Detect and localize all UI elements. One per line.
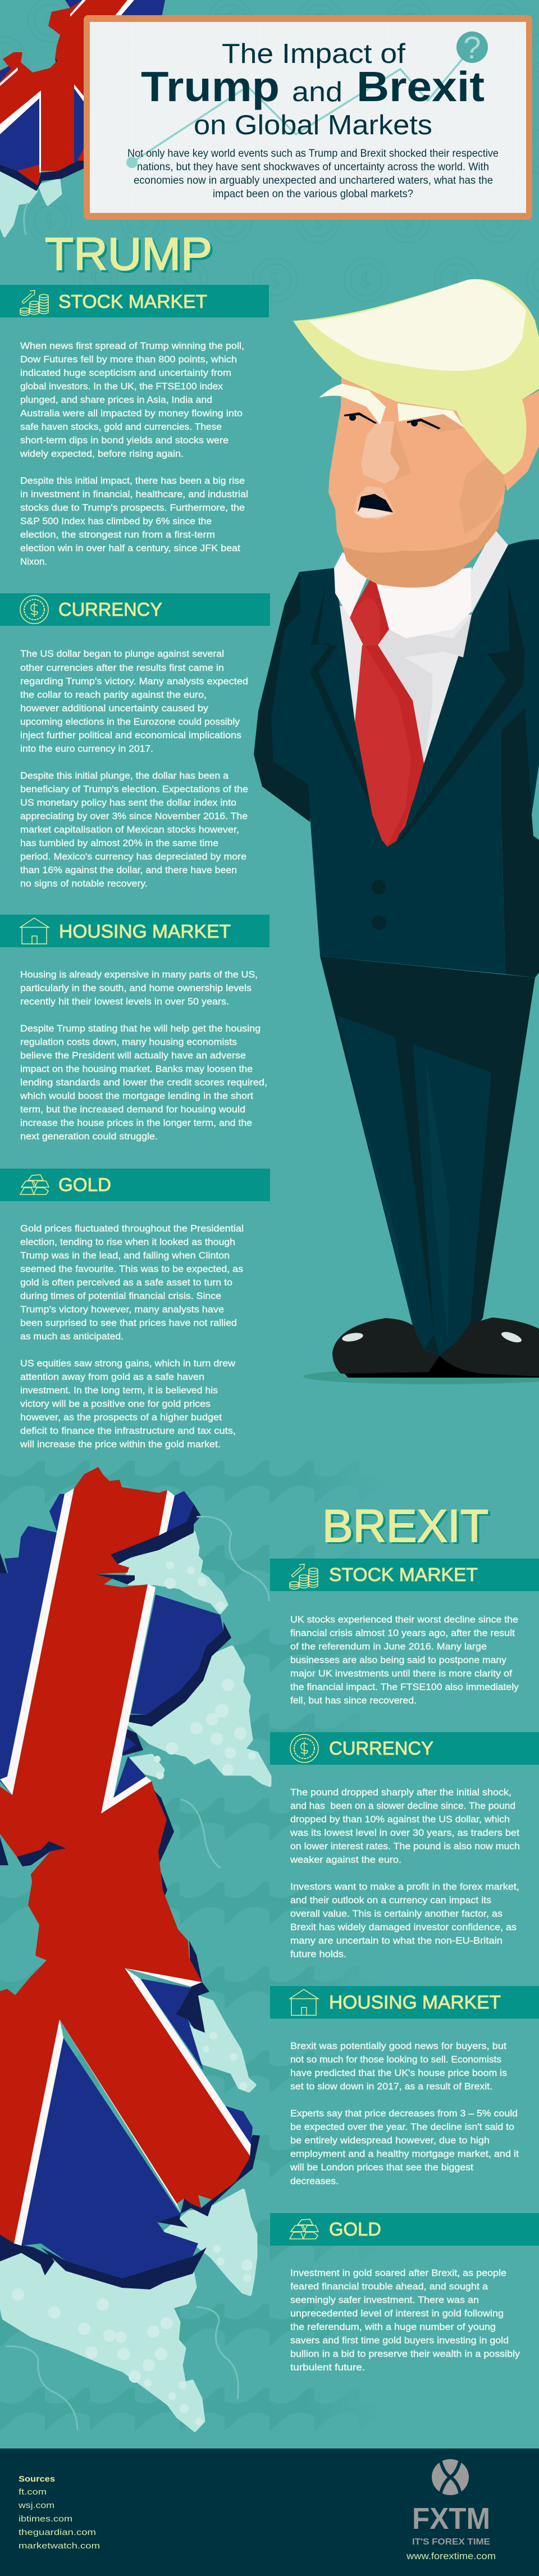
mouth [354,486,395,520]
text [290,2268,520,2373]
text: unprecedented level of interest in gold following [290,2308,504,2319]
heading: STOCK MARKET [58,291,207,312]
text: US monetary policy has sent the dollar index into [20,797,236,808]
text: beneficiary of Trump's election. Expectations of the [20,784,248,794]
text: Investors want to make a profit in the forex market, [290,1881,519,1892]
wave pattern background [0,1461,314,2430]
right sleeve dark [501,815,539,978]
band [0,285,269,317]
red cross [0,1467,250,2243]
text: short-term dips in bond yields and stocks were [20,435,229,446]
text: no signs of notable recovery. [20,878,148,889]
text: the referendum, with a huge number of young [290,2321,496,2332]
coin pattern background [0,0,539,302]
intro text [127,147,499,200]
sources: ft.com [19,2487,47,2497]
text: impact on the housing market. Banks may loosen the [20,1064,253,1074]
heading: GOLD [58,1174,111,1195]
sources: marketwatch.com [19,2541,100,2551]
text: the financial impact. The FTSE100 also immediately [290,1682,519,1692]
title text: Brexit [357,63,485,110]
band [0,593,270,626]
text: was its lowest level in over 30 years, as traders bet [290,1827,519,1838]
text: market capitalisation of Mexican stocks however, [20,824,239,835]
text: upcoming elections in the Eurozone could possibly [20,716,240,727]
text: employment and a healthy mortgage market, and it [290,2148,519,2159]
heading: GOLD [329,2219,381,2239]
text: Despite this initial impact, there has been a big rise [20,475,245,486]
text: be entirely widespread however, due to high [290,2135,490,2146]
text: of the referendum in June 2016. Many large [290,1641,487,1652]
floor shadow [303,1369,539,1384]
section: trump currency [0,593,270,889]
text: not so much for those looking to sell. Economists [290,2054,501,2065]
foam bubbles [12,1561,256,2425]
title text: Trump [141,63,280,110]
ear [504,390,539,491]
section: brexit currency [270,1732,539,1960]
text: indicated huge scepticism and uncertainty from [20,367,231,378]
text: during times of potential financial crisis. Since [20,1291,221,1301]
text [290,1614,519,1706]
hair [293,279,539,475]
text: gold is often perceived as a safe asset to turn to [20,1277,232,1288]
text: believe the President will actually have an adverse [20,1050,246,1061]
band [270,1559,539,1591]
text: other currencies after the results first came in [20,662,224,673]
icon: house [20,918,49,944]
section: brexit housing market [270,1986,539,2187]
brand name: FXTM [412,2502,490,2536]
text: UK stocks experienced their worst decline since the [290,1614,518,1625]
band [270,2213,539,2246]
eyes [344,412,441,429]
text [20,1223,244,1450]
white stripes [0,1488,251,2246]
chart line decoration [126,30,488,168]
text: Gold prices fluctuated throughout the Presidential [20,1223,244,1234]
website: www.forextime.com [406,2551,496,2561]
text: will increase the price within the gold market. [20,1439,221,1450]
text: US equities saw strong gains, which in turn drew [20,1358,236,1369]
text: as much as anticipated. [20,1331,124,1342]
section: trump gold [0,1169,270,1450]
section: trump housing market [0,915,270,1142]
heading: HOUSING MARKET [329,1992,501,2012]
text: and has been on a slower decline since. The pound [290,1800,515,1811]
cheek shade [459,457,505,534]
blue fields [0,1491,253,2278]
section: trump stock market [0,285,269,567]
icon: gold bars [290,2219,318,2239]
text: period. Mexico's currency has depreciated by more [20,851,246,862]
text [20,648,248,889]
left sleeve [254,572,326,822]
text: fell, but has since recovered. [290,1695,417,1706]
intro text: impact been on the various global markets? [213,188,413,200]
eyebrows [319,384,488,441]
face [328,378,505,553]
intro text: economies now in arguably unexpected and unchartered waters, what has the [134,174,493,187]
text: savers and first time gold buyers investing in gold [290,2335,509,2346]
text: turbulent future. [290,2362,365,2373]
text: recently hit their lowest levels in over 50 years. [20,996,229,1007]
text: weaker against the euro. [290,1854,401,1865]
text: next generation could struggle. [20,1131,158,1142]
text: however additional uncertainty caused by [20,703,209,714]
text: term, but the increased demand for housing would [20,1104,245,1115]
sea streaks [6,1516,269,2430]
section: brexit stock market [270,1559,539,1706]
text: Brexit has widely damaged investor confidence, as [290,1921,517,1933]
text: which would boost the mortgage lending in the short [20,1091,253,1101]
text: appreciating by over 3% since November 2016. The [20,811,248,821]
text: increase the house prices in the longer term, and the [20,1117,252,1128]
text: seemingly safer investment. There was an [290,2295,479,2305]
sources [18,2474,100,2551]
text: Despite Trump stating that he will help get the housing [20,1023,261,1034]
heading: BREXIT: BREXIT [322,1501,488,1552]
shoes [332,1317,539,1378]
title text: and [292,77,342,107]
text: Investment in gold soared after Brexit, as people [290,2268,506,2278]
text: inject further political and economical implications [20,730,241,740]
text: The pound dropped sharply after the initial shock, [290,1787,511,1798]
band [270,1986,539,2019]
footer [0,2448,539,2576]
text: Dow Futures fell by more than 800 points, which [20,354,237,365]
nose [361,421,412,484]
shirt [340,606,472,764]
heading: CURRENCY [329,1738,433,1759]
text [290,1787,520,1960]
icon: stock coins [20,290,48,316]
icon: FXTM logo [432,2459,469,2495]
jacket shading [310,583,532,930]
text [290,2041,519,2187]
text: election, tending to rise when it looked as though [20,1237,235,1247]
text: S&P 500 Index has climbed by 6% since the [20,516,212,526]
text: plunged, and share prices in Asia, India and [20,394,212,405]
text: election, the strongest run from a first-term [20,529,215,540]
text: future holds. [290,1948,346,1960]
text: decreases. [290,2175,339,2187]
tie [349,579,424,847]
heading: TRUMP: TRUMP [47,231,214,282]
top flag map of UK [0,0,165,236]
heading: BREXIT: BREXIT [325,1502,491,1553]
title text: on Global Markets [194,110,432,140]
text: into the euro currency in 2017. [20,743,153,754]
heading: STOCK MARKET [329,1564,478,1585]
text: will be London prices that see the biggest [290,2162,473,2173]
text: Brexit was potentially good news for buyers, but [290,2041,506,2051]
icon: gold bars [20,1175,49,1194]
text: The US dollar began to plunge against several [20,648,224,659]
text: seemed the favourite. This was to be expected, as [20,1264,243,1274]
icon: dollar coin [20,596,48,624]
text: have predicted that the UK's house price boom is [290,2068,507,2078]
text: financial crisis almost 10 years ago, after the result [290,1628,515,1638]
text: Trump was in the lead, and falling when Clinton [20,1250,230,1261]
heading: HOUSING MARKET [59,921,231,942]
text: attention away from gold as a safe haven [20,1371,204,1382]
text: regulation costs down, many housing economists [20,1037,237,1047]
text: election win in over half a century, since JFK beat [20,543,240,553]
chart line decoration: ? [463,30,481,65]
text: businesses are also being said to postpone many [290,1655,507,1665]
text: When news first spread of Trump winning the poll, [20,340,244,351]
icon: dollar coin [290,1734,318,1762]
text [20,340,248,567]
navy shadow [0,1504,260,2289]
trousers [320,956,535,1356]
sources: ibtimes.com [19,2514,72,2524]
text: the collar to reach parity against the euro, [20,689,207,700]
text: than 16% against the dollar, and there have been [20,865,237,875]
sources: Sources [19,2474,55,2484]
neck [342,489,505,588]
intro text: nations, but they have sent shockwaves of uncertainty across the world. With [137,161,489,173]
trump illustration [254,279,539,1384]
text: safe haven stocks, gold and currencies. These [20,421,222,432]
text: victory will be a positive one for gold prices [20,1398,211,1409]
section: brexit gold [270,2213,539,2373]
text: Despite this initial plunge, the dollar has been a [20,770,229,781]
text: overall value. This is certainly another factor, as [290,1908,503,1919]
text: Housing is already expensive in many parts of the US, [20,969,258,980]
text [20,969,267,1142]
text: investment. In the long term, it is believed his [20,1385,218,1396]
heading: CURRENCY [58,599,162,620]
text: global investors. In the UK, the FTSE100 index [20,381,223,392]
icon: house [290,1989,318,2015]
text: set to slow down in 2017, as a result of Brexit. [290,2081,492,2092]
title card [84,15,532,220]
text: in investment in financial, healthcare, and industrial [20,489,248,499]
text: feared financial trouble ahead, and sought a [290,2281,488,2292]
collar [334,552,472,638]
text: Nixon. [20,556,47,567]
text: Australia were all impacted by money flowing into [20,408,243,419]
sources: theguardian.com [19,2528,96,2537]
text: widely expected, before rising again. [20,448,184,459]
band [0,1169,270,1201]
sources: wsj.com [18,2501,54,2510]
text: and their outlook on a currency can impact its [290,1894,491,1906]
text: lending standards and lower the credit scores required, [20,1077,267,1088]
text: has tumbled by almost 20% in the same time [20,838,218,848]
title text [141,39,485,140]
text: bullion in a bid to preserve their wealth in a possibly [290,2348,520,2359]
title text: The Impact of [222,39,405,69]
tagline: IT'S FOREX TIME [412,2537,490,2547]
intro text: Not only have key world events such as Trump and Brexit shocked their respective [127,147,499,160]
text: stocks due to Trump's prospects. Furthermore, the [20,502,245,513]
heading: TRUMP: TRUMP [45,229,212,280]
foam spray [0,1533,270,2430]
text: however, as the prospects of a higher budget [20,1412,222,1423]
text: major UK investments until there is more clarity of [290,1668,512,1679]
band [270,1732,539,1765]
text: on lower interest rates. The pound is also now much [290,1841,520,1852]
text: be expected over the year. The decline isn't said to [290,2121,514,2132]
text: Trump's victory however, many analysts have [20,1304,224,1315]
text: regarding Trump's victory. Many analysts expected [20,676,248,687]
text: dropped by than 10% against the US dollar, which [290,1814,510,1825]
text: deficit to finance the infrastructure and tax cuts, [20,1425,236,1436]
eye shade [418,411,464,432]
icon: stock coins [290,1564,318,1589]
large flag map of UK [0,1467,270,2430]
jacket body [299,539,539,974]
band [0,915,270,947]
text: Experts say that price decreases from 3 – 5% could [290,2108,518,2119]
text: particularly in the south, and home ownership levels [20,983,252,993]
text: many are uncertain to what the non-EU-Britain [290,1935,503,1946]
text: been surprised to see that prices have not rallied [20,1317,237,1328]
